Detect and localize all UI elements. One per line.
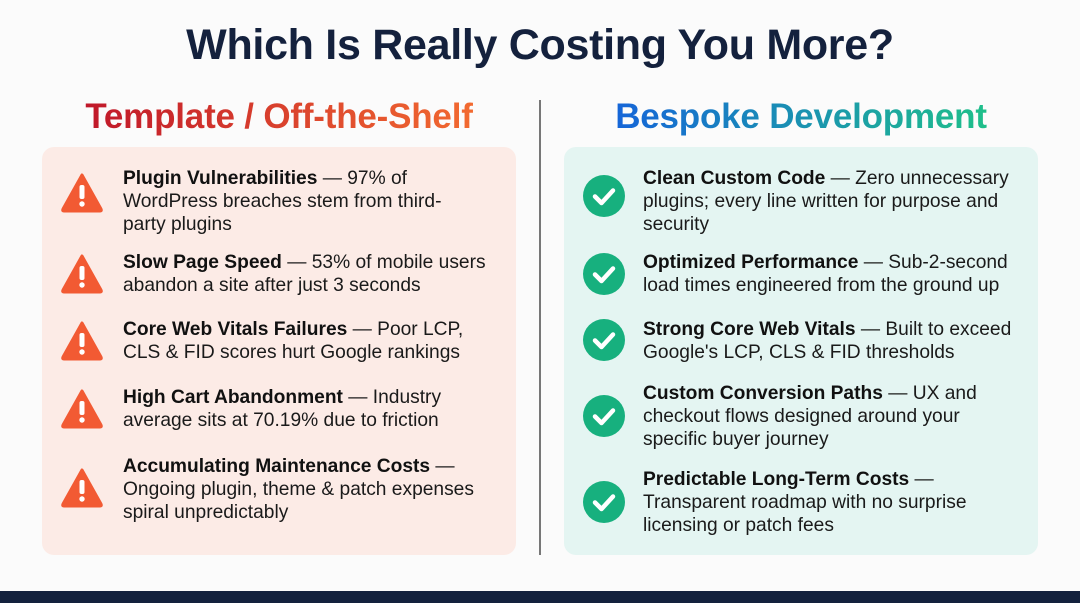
text: Transparent roadmap with no surprise: [643, 492, 966, 513]
text: Optimized Performance — Sub-2-second: [643, 252, 1008, 273]
text: [123, 168, 441, 235]
icon: warning: [61, 468, 103, 508]
divider: [539, 100, 541, 555]
icon: check: [583, 253, 625, 295]
text: [643, 319, 1011, 363]
text: security: [643, 214, 709, 235]
text: Slow Page Speed — 53% of mobile users: [123, 252, 486, 273]
text: [643, 252, 1008, 296]
icon: check: [583, 319, 625, 361]
heading: template: Template / Off-the-Shelf: [85, 97, 473, 136]
text: Accumulating Maintenance Costs —: [123, 456, 455, 477]
text: Google's LCP, CLS & FID thresholds: [643, 342, 955, 363]
text: average sits at 70.19% due to friction: [123, 410, 439, 431]
text: [643, 383, 977, 450]
text: CLS & FID scores hurt Google rankings: [123, 342, 460, 363]
text: [123, 387, 441, 431]
text: Custom Conversion Paths — UX and: [643, 383, 977, 404]
icon: check: [583, 395, 625, 437]
text: [643, 469, 966, 536]
item: slow page speed: [61, 252, 486, 296]
text: Strong Core Web Vitals — Built to exceed: [643, 319, 1011, 340]
text: abandon a site after just 3 seconds: [123, 275, 421, 296]
text: party plugins: [123, 214, 232, 235]
item: predictable costs: [583, 469, 966, 536]
icon: warning: [61, 321, 103, 360]
text: Clean Custom Code — Zero unnecessary: [643, 168, 1009, 189]
item: core web vitals failures: [61, 319, 463, 363]
text: checkout flows designed around your: [643, 406, 960, 427]
text: licensing or patch fees: [643, 515, 834, 536]
text: plugins; every line written for purpose and: [643, 191, 998, 212]
item: strong core web vitals: [583, 319, 1011, 363]
text: [123, 456, 474, 523]
icon: warning: [61, 254, 103, 294]
item: custom conversion paths: [583, 383, 977, 450]
text: Plugin Vulnerabilities — 97% of: [123, 168, 407, 189]
icon: check: [583, 481, 625, 523]
icon: warning: [61, 173, 103, 212]
item: clean custom code: [583, 168, 1009, 235]
icon: check: [583, 175, 625, 217]
icon: warning: [61, 389, 103, 428]
text: Ongoing plugin, theme & patch expenses: [123, 479, 474, 500]
text: [123, 252, 486, 296]
panel: bespoke: [564, 147, 1038, 555]
heading: bespoke: Bespoke Development: [615, 97, 987, 136]
item: optimized performance: [583, 252, 1008, 296]
text: Core Web Vitals Failures — Poor LCP,: [123, 319, 463, 340]
text: load times engineered from the ground up: [643, 275, 999, 296]
text: Predictable Long-Term Costs —: [643, 469, 934, 490]
text: High Cart Abandonment — Industry: [123, 387, 441, 408]
title: Which Is Really Costing You More?: [186, 21, 894, 69]
item: plugin vulnerabilities: [61, 168, 441, 235]
text: [643, 168, 1009, 235]
panel: template: [42, 147, 516, 555]
item: maintenance costs: [61, 456, 474, 523]
text: specific buyer journey: [643, 429, 829, 450]
footer bar: [0, 591, 1080, 603]
text: [123, 319, 463, 363]
item: high cart abandonment: [61, 387, 441, 431]
text: WordPress breaches stem from third-: [123, 191, 441, 212]
text: spiral unpredictably: [123, 502, 288, 523]
